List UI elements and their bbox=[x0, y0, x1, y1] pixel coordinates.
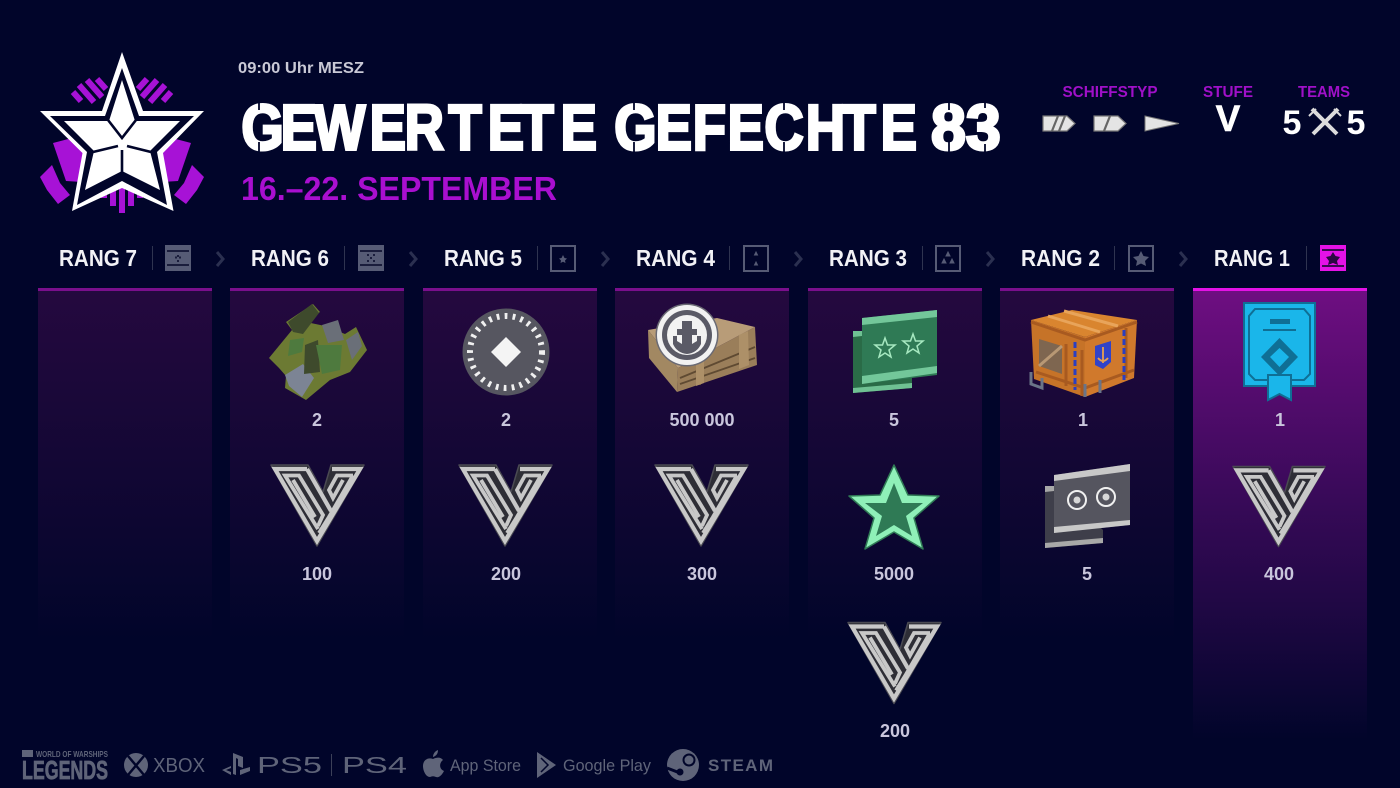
amount: 200 bbox=[880, 721, 910, 741]
amount: 2 bbox=[501, 410, 511, 430]
header info: tier: STUFE bbox=[1203, 84, 1253, 101]
amount: 5000 bbox=[874, 564, 914, 584]
footer: platform logos: App Store bbox=[450, 756, 521, 775]
reward: camouflage bbox=[269, 304, 367, 400]
reward: grey signal flag bbox=[1045, 464, 1130, 548]
title: 83 bbox=[931, 93, 1001, 164]
header info: ship type: SCHIFFSTYP bbox=[1062, 84, 1158, 101]
column: rank 4: RANG 4 bbox=[636, 245, 715, 271]
footer: platform logos: WORLD OF WARSHIPS bbox=[36, 749, 108, 759]
amount: 2 bbox=[312, 410, 322, 430]
column: rank 6 bbox=[230, 245, 404, 640]
column: rank 5: RANG 5 bbox=[444, 245, 522, 271]
header info: tier bbox=[1203, 84, 1253, 139]
header info: tier: V bbox=[1216, 98, 1241, 139]
title: GEFECHTE bbox=[614, 91, 917, 164]
amount: 300 bbox=[687, 564, 717, 584]
reward: premium orange crate bbox=[1031, 310, 1137, 397]
column: rank 4 bbox=[615, 245, 789, 640]
column: rank 2: RANG 2 bbox=[1021, 245, 1100, 271]
title: GEWERTETE bbox=[241, 91, 597, 164]
reward: blue certificate bbox=[1244, 303, 1315, 400]
column: rank 1 highlighted bbox=[1193, 245, 1367, 740]
amount: 100 bbox=[302, 564, 332, 584]
reward: points bbox=[655, 465, 748, 546]
reward: points bbox=[848, 622, 941, 704]
footer: platform logos: Google Play bbox=[563, 756, 651, 775]
footer: platform logos: PS5 bbox=[257, 752, 322, 778]
column: rank 3 bbox=[808, 245, 982, 741]
amount: 200 bbox=[491, 564, 521, 584]
reward: green star bbox=[849, 465, 939, 549]
column: rank 7: RANG 7 bbox=[59, 245, 137, 271]
footer: platform logos bbox=[22, 749, 773, 785]
time label: 09:00 Uhr MESZ bbox=[238, 60, 365, 77]
header info: teams: 5 bbox=[1347, 104, 1365, 142]
footer: platform logos: PS4 bbox=[342, 752, 407, 778]
arrow bbox=[795, 252, 801, 266]
arrow bbox=[410, 252, 416, 266]
amount: 400 bbox=[1264, 564, 1294, 584]
arrow bbox=[217, 252, 223, 266]
reward: points bbox=[459, 465, 552, 546]
title bbox=[241, 91, 1001, 164]
column: rank 1 highlighted: RANG 1 bbox=[1214, 245, 1290, 271]
footer: platform logos: XBOX bbox=[153, 755, 205, 777]
logo: ranked battles star emblem bbox=[40, 52, 204, 213]
amount: 5 bbox=[1082, 564, 1092, 584]
arrow bbox=[602, 252, 608, 266]
amount: 1 bbox=[1275, 410, 1285, 430]
header info: teams: TEAMS bbox=[1298, 84, 1350, 101]
reward: points bbox=[1233, 466, 1325, 547]
reward: signal token bbox=[462, 308, 550, 396]
column: rank 3: RANG 3 bbox=[829, 245, 907, 271]
reward: green signal flag bbox=[853, 310, 937, 393]
column: rank 5 bbox=[423, 245, 597, 640]
column: rank 6: RANG 6 bbox=[251, 245, 329, 271]
column: rank 2 bbox=[1000, 245, 1174, 640]
arrow bbox=[987, 252, 993, 266]
footer: platform logos: LEGENDS bbox=[22, 755, 108, 785]
footer: platform logos: STEAM bbox=[708, 756, 773, 775]
reward: points bbox=[271, 465, 364, 546]
header info: ship type bbox=[1043, 84, 1179, 131]
amount: 5 bbox=[889, 410, 899, 430]
arrow bbox=[1180, 252, 1186, 266]
reward: credits crate bbox=[648, 304, 757, 392]
header info: teams: 5 bbox=[1283, 104, 1301, 142]
column: rank 7 bbox=[38, 245, 212, 640]
amount: 1 bbox=[1078, 410, 1088, 430]
header info: teams bbox=[1283, 84, 1365, 142]
date: 16.–22. SEPTEMBER bbox=[241, 170, 557, 207]
amount: 500 000 bbox=[669, 410, 735, 430]
